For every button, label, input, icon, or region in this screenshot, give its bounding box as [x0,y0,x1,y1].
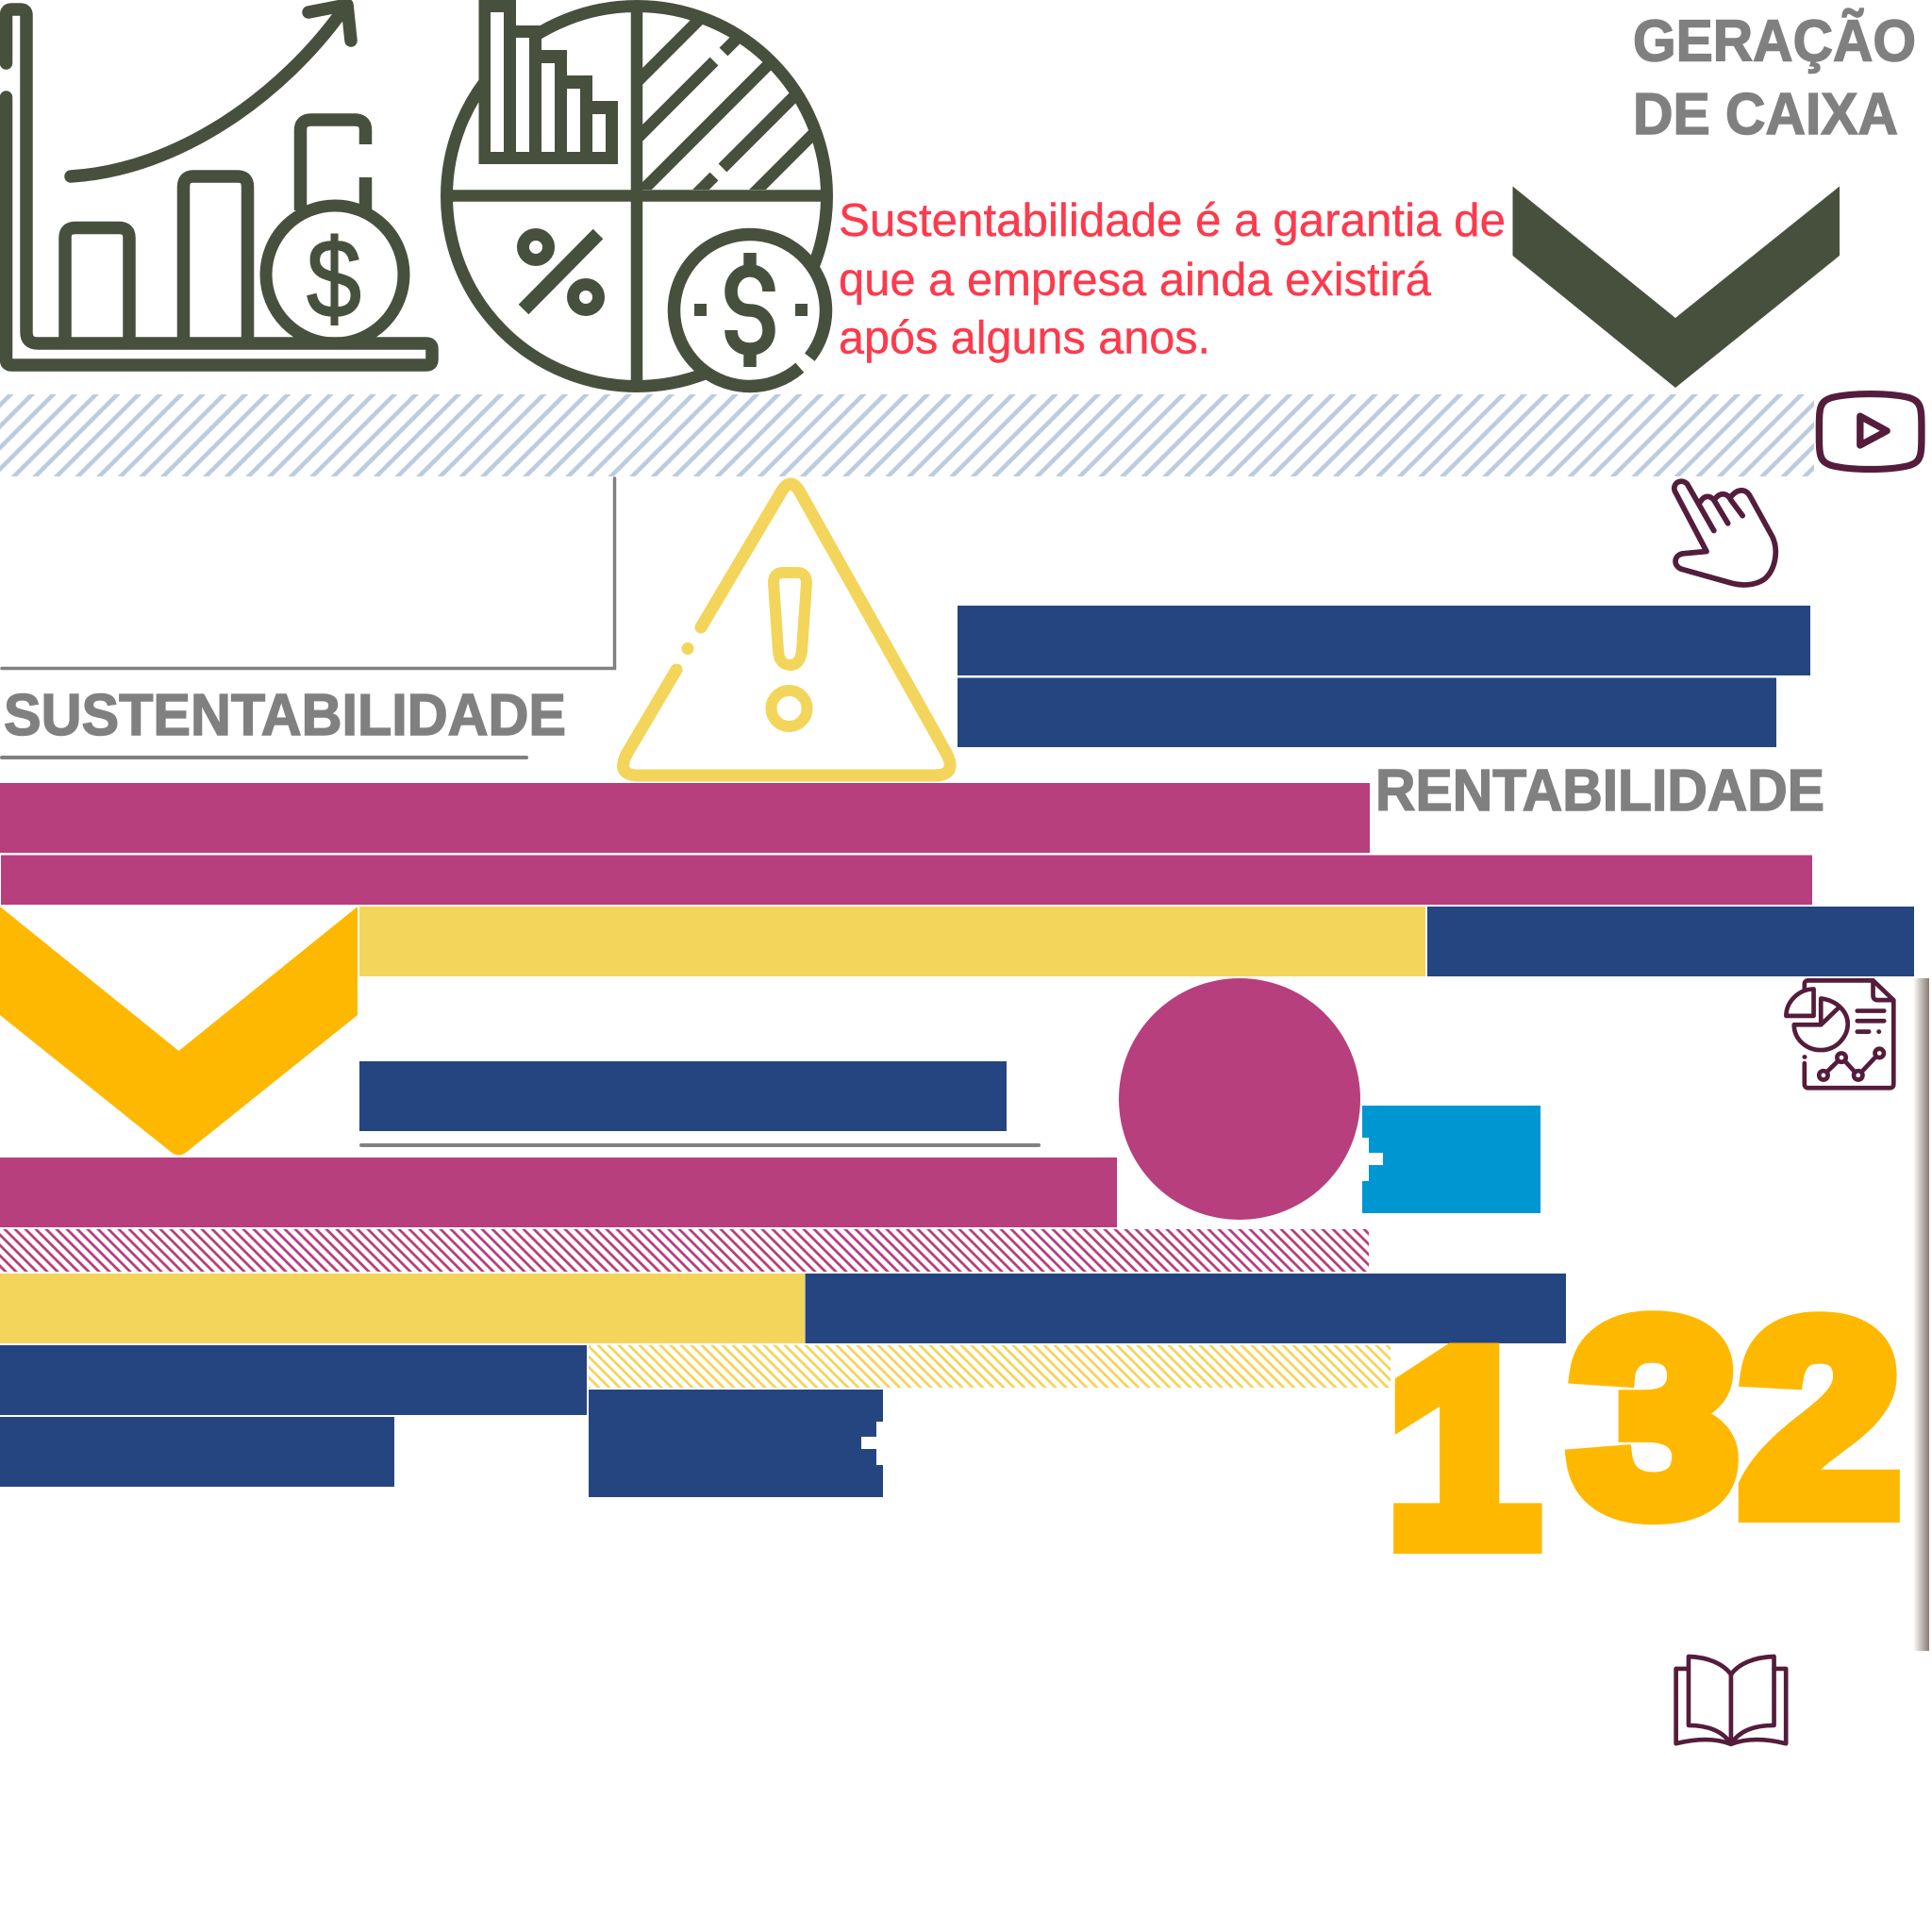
redacted bar: navy [359,1061,1007,1131]
redacted bar: magenta [1,855,1812,905]
icon: report document [1786,980,1893,1088]
big number 132: 1 [1388,1296,1539,1601]
big number 132: 2 [1740,1268,1899,1569]
redacted bar: navy [0,1345,587,1415]
pie outline [447,6,826,387]
blue block [1362,1106,1541,1213]
redacted bar: navy [806,1274,1566,1343]
rising arrow [71,5,351,176]
red statement text [839,195,1506,364]
coin with dollar sign: $ [307,216,361,341]
icon: warning triangle [624,484,950,775]
redacted bar: navy [958,606,1810,675]
redacted bar: magenta [0,1158,1117,1227]
hatched yellow band [589,1345,1391,1388]
red statement text: que a empresa ainda existirá [839,255,1432,306]
hatched quadrant [642,21,813,190]
mini bar chart [479,0,618,164]
percent sign [523,234,598,309]
big number 132: 3 [1572,1266,1737,1568]
icon: open book [1676,1657,1786,1744]
hatched magenta band [0,1229,1369,1272]
heading: sustentabilidade: SUSTENTABILIDADE [4,683,566,748]
heading: rentabilidade: RENTABILIDADE [1375,758,1824,824]
red statement text: Sustentabilidade é a garantia de [839,195,1506,246]
heading: geração de caixa: DE CAIXA [1633,82,1898,147]
icon: play button [1819,394,1922,469]
icon: pointing hand [1674,481,1775,585]
right shadow strip [1907,978,1929,1651]
green chevron [1513,187,1840,388]
gray rule [359,1143,1041,1147]
coin with dollar sign [266,206,404,343]
redacted bar: navy [1427,907,1914,976]
heading underline [0,756,528,759]
heading: geração de caixa [1633,9,1916,147]
icon: pie chart with mini bars, percent and coin [441,0,833,392]
coin with dollar [642,203,858,418]
redacted bar: yellow [0,1274,805,1343]
magenta circle [1119,978,1360,1220]
heading: geração de caixa: GERAÇÃO [1633,9,1916,74]
hatched blue band [0,394,1814,476]
redacted bar: navy [958,677,1776,747]
redacted bar: navy [0,1417,394,1487]
navy block [589,1390,883,1497]
gray connector line [2,478,615,668]
orange chevron [0,907,358,1155]
big number 132 [1388,1266,1899,1601]
chart axis [6,9,432,365]
redacted bar: yellow [359,907,1425,976]
icon: bar chart with rising arrow and coin [6,5,432,365]
chart bars [65,120,366,343]
pie cross lines [443,9,830,383]
red statement text: após alguns anos. [839,313,1210,364]
redacted bar: magenta [0,783,1370,853]
